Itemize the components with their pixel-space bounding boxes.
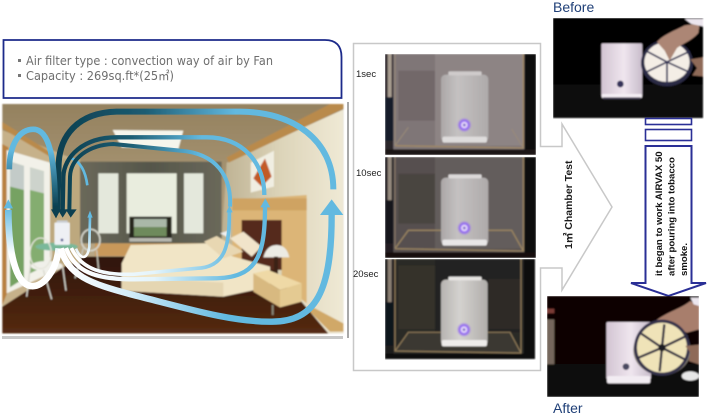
blue down arrow with note <box>631 146 706 296</box>
bed lamp <box>263 245 289 257</box>
bullet one <box>18 59 21 62</box>
left wall <box>2 130 80 307</box>
blue down arrow with note: after pouring into tobacco <box>666 157 678 276</box>
window wall <box>80 162 222 243</box>
spec box <box>4 40 342 98</box>
wall picture <box>251 151 274 193</box>
photo: before filter <box>553 18 703 118</box>
bedroom scene <box>2 104 343 333</box>
arrowheads <box>4 198 343 218</box>
blue down arrow with note: smoke. <box>679 243 690 276</box>
headboard <box>232 195 307 303</box>
table and chairs <box>35 243 78 251</box>
photo: 10 seconds <box>385 157 536 258</box>
airflow arrows: supply from device <box>8 207 332 322</box>
photo: 20 seconds <box>385 259 535 359</box>
tv <box>129 217 172 239</box>
door <box>2 144 8 305</box>
spec line: filter type: Air filter type : convection way of air by Fan <box>26 54 273 68</box>
airflow arrows: return to device <box>9 112 333 210</box>
time label: 1sec: 1sec <box>356 69 376 80</box>
after heading: After <box>553 400 583 416</box>
room illustration with airflow <box>2 104 343 333</box>
blue connector bars <box>646 118 692 140</box>
bed <box>122 243 270 297</box>
divider line beside room <box>347 102 349 338</box>
air purifier device <box>54 220 70 245</box>
console <box>95 243 205 256</box>
ceiling lamp <box>113 130 183 149</box>
room bottom rule <box>2 336 343 339</box>
chamber test outline arrow <box>354 44 612 370</box>
nightstand <box>253 270 302 290</box>
bullet two <box>18 74 21 77</box>
chamber test label: 1㎡ Chamber Test <box>563 160 575 249</box>
time label: 20sec: 20sec <box>353 269 379 280</box>
floor <box>2 257 328 333</box>
spec line: capacity: Capacity : 269sq.ft*(25㎡) <box>26 69 174 83</box>
photo: after filter <box>547 296 699 397</box>
photo: 1 second <box>385 54 536 155</box>
note text: it began to work AIRVAX 50 <box>654 151 665 276</box>
right wall <box>222 109 343 333</box>
time label: 10sec: 10sec <box>356 168 382 179</box>
